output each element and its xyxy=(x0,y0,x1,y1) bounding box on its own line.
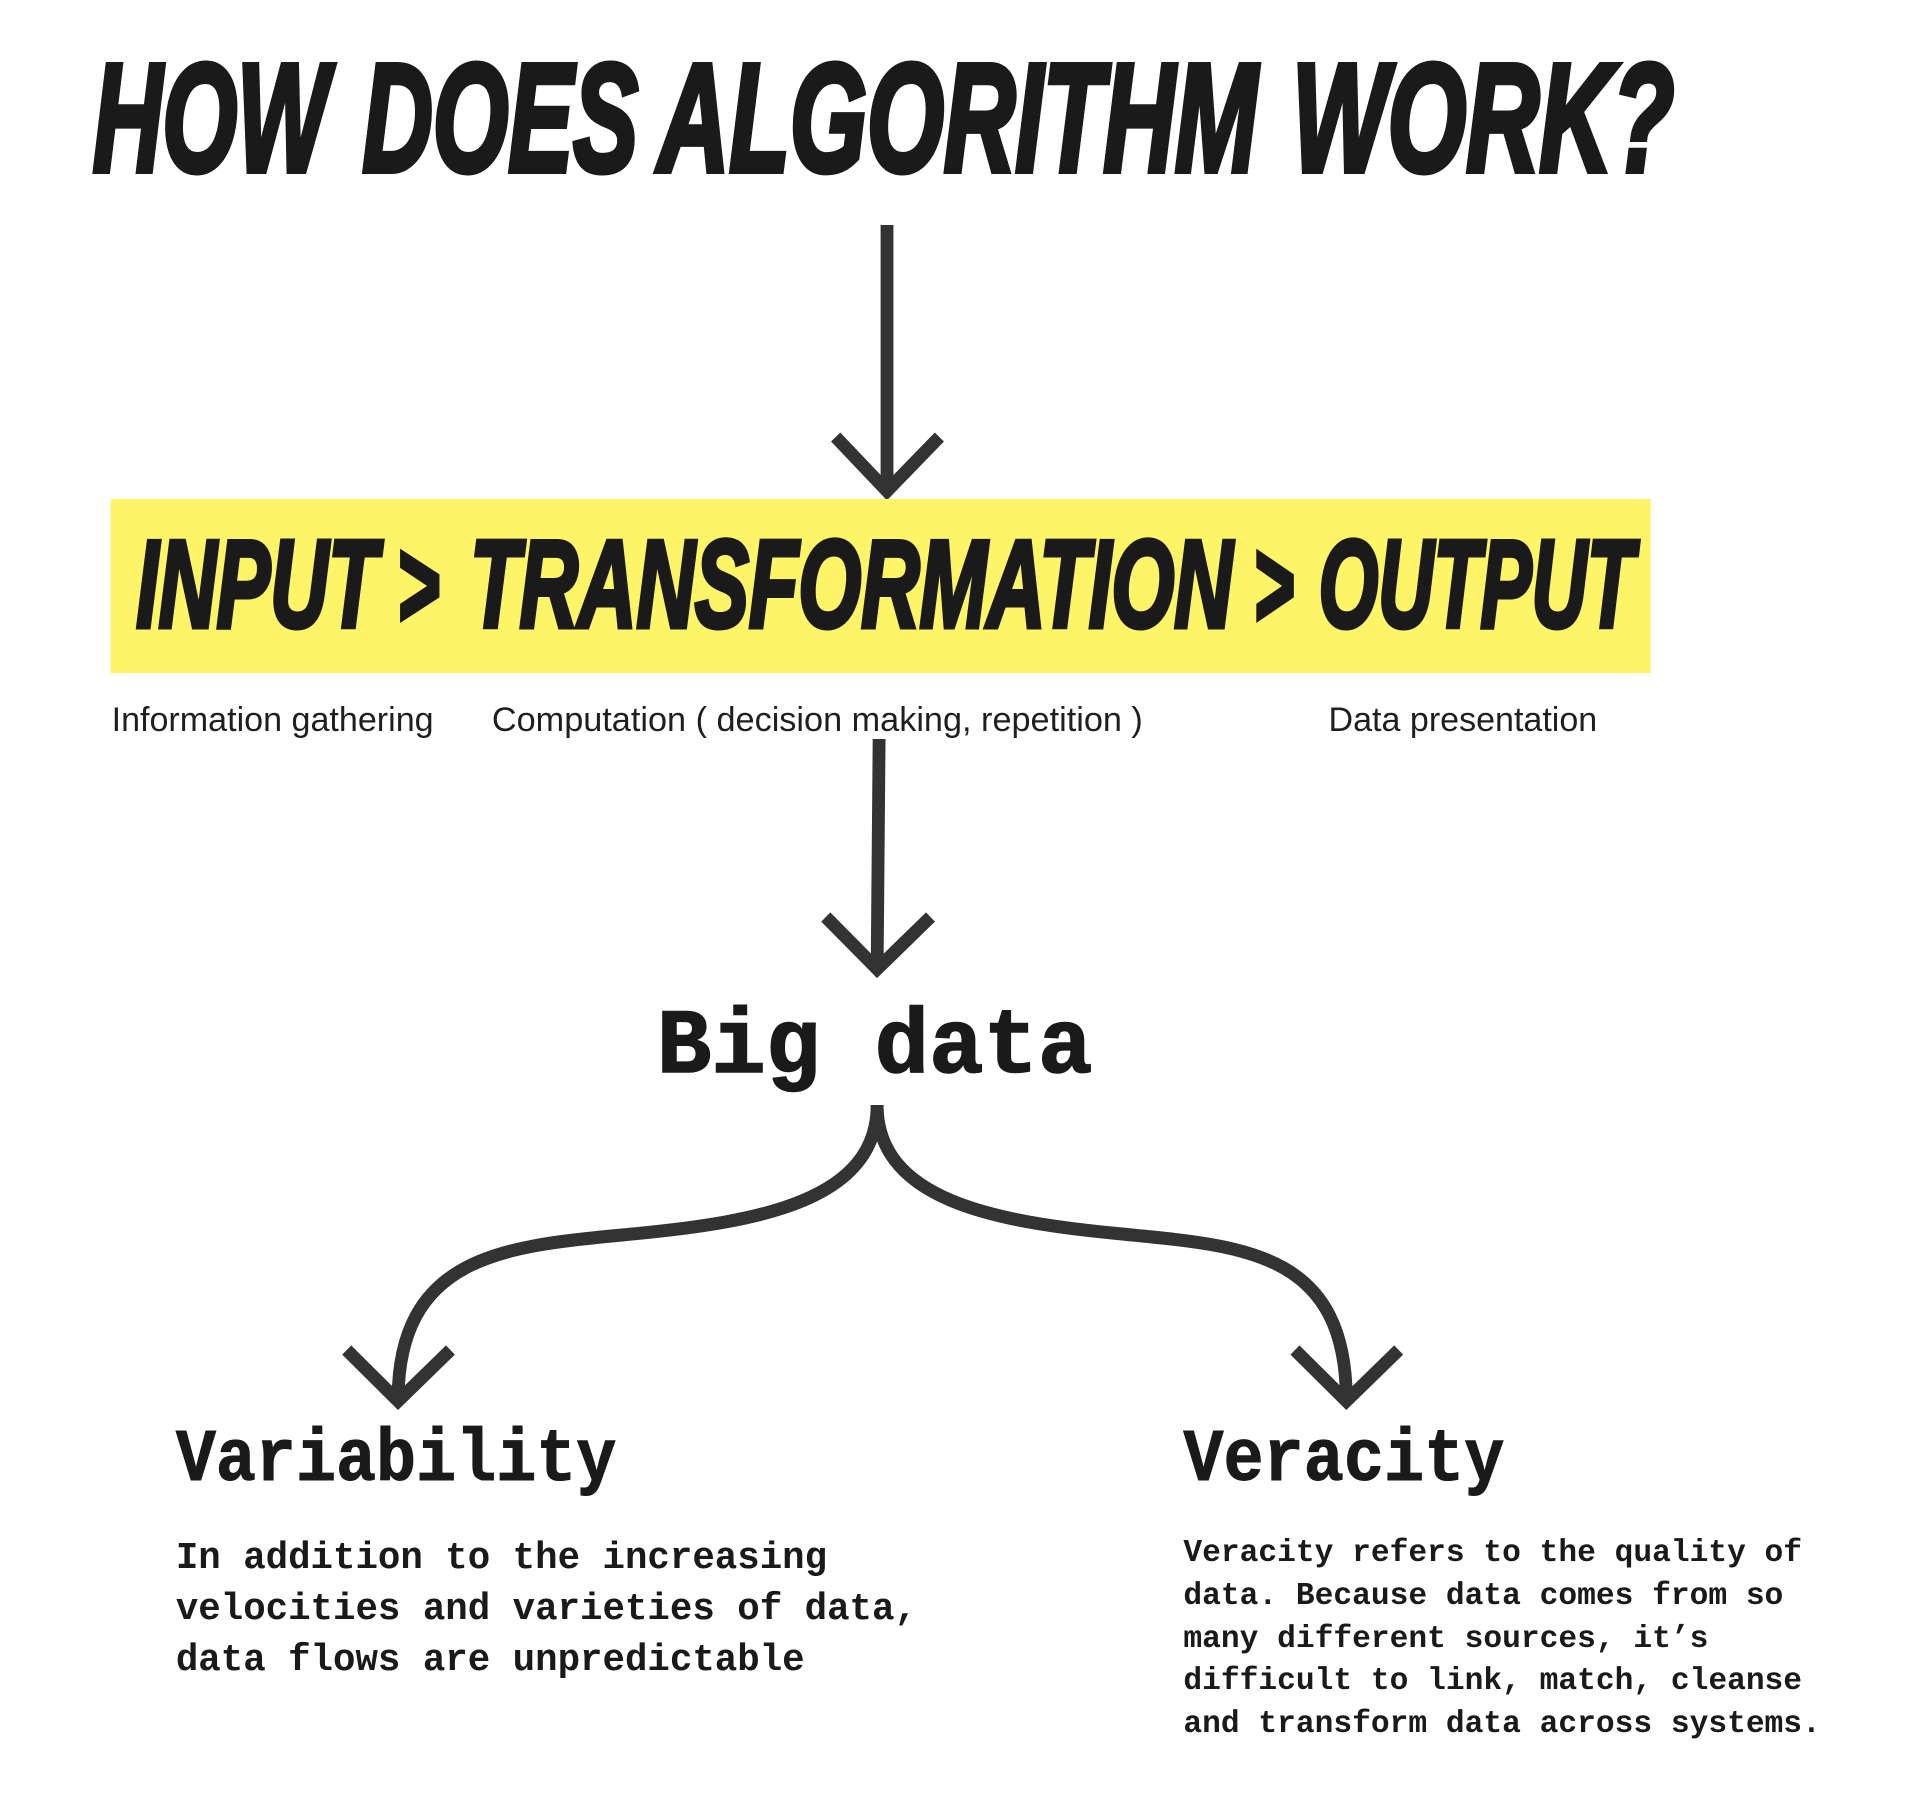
process step captions: Computation ( decision making, repetition ) xyxy=(492,701,1143,739)
arrow: title to process xyxy=(836,225,939,491)
text: veracity description: Veracity refers to the quality of xyxy=(1183,1536,1802,1571)
banner text: OUTPUT xyxy=(1319,515,1639,654)
heading: variability: Variability xyxy=(176,1420,616,1503)
panel: veracity xyxy=(1183,1420,1821,1742)
banner background xyxy=(111,499,1651,673)
arrow: process to big data xyxy=(826,739,930,969)
text: variability description: data flows are unpredictable xyxy=(176,1640,805,1682)
title: DOES xyxy=(363,32,638,204)
banner text: > xyxy=(1253,515,1294,654)
text: variability description: velocities and varieties of data, xyxy=(176,1589,917,1631)
text: veracity description: many different sources, it’s xyxy=(1183,1622,1708,1657)
text: veracity description xyxy=(1183,1536,1821,1742)
text: variability description xyxy=(176,1538,917,1682)
banner text: INPUT xyxy=(136,515,383,654)
text: veracity description: data. Because data comes from so xyxy=(1183,1579,1783,1614)
title: HOW xyxy=(93,32,335,204)
title xyxy=(93,32,1674,204)
text: variability description: In addition to the increasing xyxy=(176,1538,827,1580)
title: ALGORITHM xyxy=(655,32,1260,204)
arrow: big data to veracity xyxy=(877,1105,1399,1401)
text: veracity description: and transform data across systems. xyxy=(1183,1707,1821,1742)
banner text: TRANSFORMATION xyxy=(470,515,1235,654)
heading: veracity: Veracity xyxy=(1183,1420,1504,1503)
banner text: > xyxy=(397,515,440,654)
text: veracity description: difficult to link, match, cleanse xyxy=(1183,1664,1802,1699)
title: WORK? xyxy=(1292,32,1674,204)
process step captions xyxy=(112,701,1597,739)
panel: variability xyxy=(176,1420,917,1682)
heading: big data: Big data xyxy=(657,997,1092,1100)
panel: input transformation output banner xyxy=(111,499,1651,673)
arrow: big data to variability xyxy=(347,1105,877,1401)
process step captions: Information gathering xyxy=(112,701,434,739)
process step captions: Data presentation xyxy=(1329,701,1597,739)
